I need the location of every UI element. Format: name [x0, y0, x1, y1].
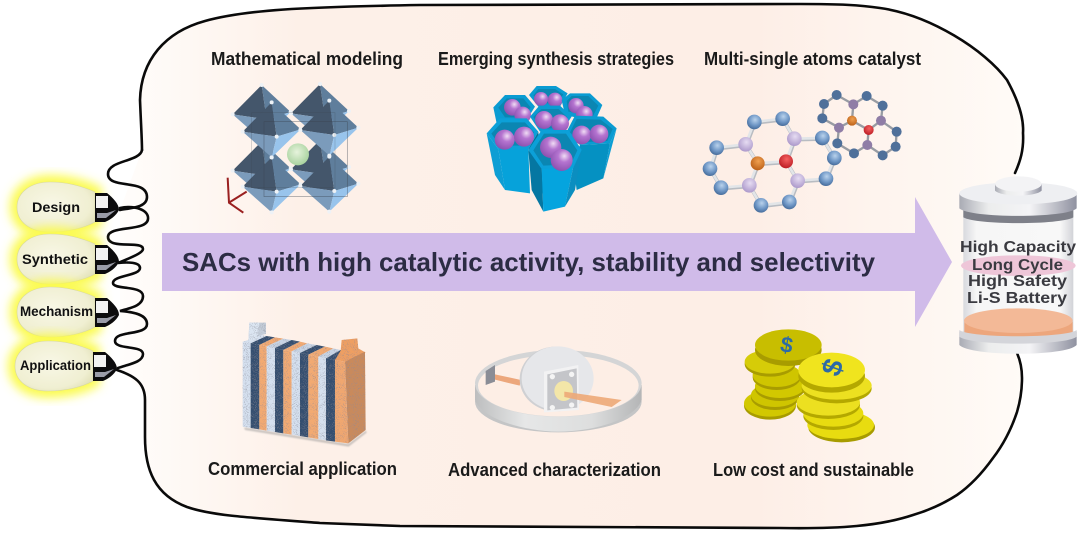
dollar sign on right stack: $	[815, 354, 850, 380]
icon: characterization instrument ring	[475, 346, 642, 432]
bulb: design	[17, 182, 119, 232]
bulb: design: Design	[32, 199, 80, 215]
battery: li-s cell: Long Cycle	[972, 257, 1063, 274]
bulb: application: Application	[20, 357, 91, 373]
small molecule	[817, 90, 902, 160]
heading: multi-single atoms catalyst: Multi-single atoms catalyst	[704, 49, 921, 69]
battery: li-s cell: High Capacity	[960, 239, 1076, 256]
arrow headline: SACs with high catalytic activity, stability and selectivity	[182, 247, 876, 277]
icon: layered battery cell	[243, 323, 367, 447]
battery: li-s cell: Li-S Battery	[967, 290, 1067, 307]
icon: perovskite crystal	[228, 82, 360, 214]
icon: stacks of gold coins	[744, 329, 875, 442]
battery: li-s cell: High Safety	[968, 273, 1067, 290]
bulb: mechanism: Mechanism	[20, 303, 93, 319]
heading: emerging synthesis strategies: Emerging synthesis strategies	[438, 49, 674, 69]
heading: commercial application: Commercial application	[208, 459, 397, 479]
central arrow	[162, 197, 952, 327]
bulb: synthetic: Synthetic	[22, 251, 88, 267]
bulb: synthetic	[17, 234, 119, 284]
heading: advanced characterization: Advanced characterization	[448, 460, 661, 480]
dollar sign on left stack: $	[778, 331, 795, 358]
icon: honeycomb with purple spheres	[487, 86, 617, 212]
heading: mathematical modeling: Mathematical modeling	[211, 49, 403, 69]
large molecule	[703, 111, 842, 213]
icon: dual-atom catalyst molecules	[703, 90, 902, 213]
bulb: application	[15, 341, 117, 391]
bulb: mechanism	[17, 287, 119, 337]
battery: li-s cell	[959, 176, 1077, 354]
heading: low cost and sustainable: Low cost and sustainable	[713, 460, 914, 480]
